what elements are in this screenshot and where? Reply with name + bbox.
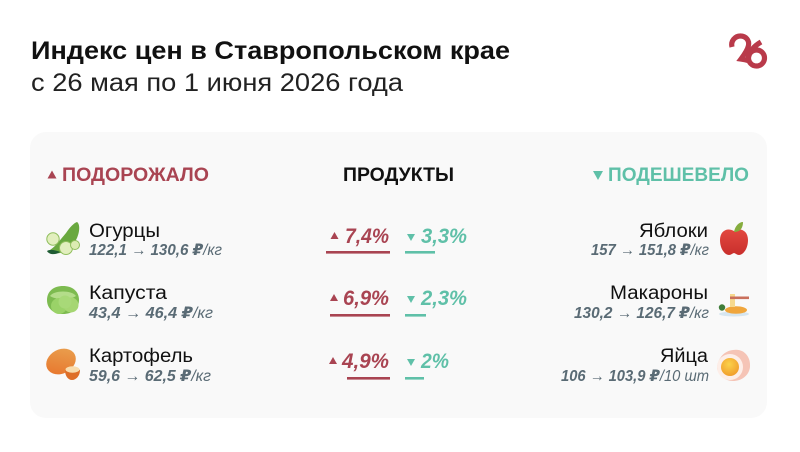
row: potato: Картофель (89, 346, 193, 367)
change row: cabbage and pasta (330, 287, 467, 317)
change row: potato and eggs: 4,9% (341, 350, 389, 373)
change row: cucumbers and apples: 7,4% (345, 225, 389, 248)
change row: cabbage and pasta: 6,9% (343, 287, 389, 310)
row: apples (591, 221, 709, 259)
title: Индекс цен в Ставропольском крае (31, 37, 510, 65)
title: с 26 мая по 1 июня 2026 года (31, 69, 403, 97)
row: cabbage (88, 283, 213, 322)
change row: cabbage and pasta: 2,3% (420, 287, 467, 310)
row: potato (89, 346, 211, 385)
heading: price rose: ПОДОРОЖАЛО (62, 165, 209, 186)
change row: cucumbers and apples (326, 225, 467, 254)
change row: potato and eggs: 2% (420, 350, 449, 373)
icon: logo 26 (732, 36, 764, 66)
row: cucumbers: Огурцы (89, 221, 160, 242)
icon: cabbage (47, 286, 79, 314)
row: cabbage: 43,4 → 46,4 ₽/кг (88, 305, 213, 322)
change row: cucumbers and apples: 3,3% (421, 225, 467, 248)
row: eggs: Яйца (660, 346, 708, 367)
heading: products: ПРОДУКТЫ (343, 165, 454, 186)
row: apples: 157 → 151,8 ₽/кг (591, 242, 709, 259)
change row: potato and eggs (329, 350, 449, 380)
title (31, 37, 510, 97)
row: eggs (561, 346, 709, 385)
icon: egg (717, 350, 750, 381)
row: potato: 59,6 → 62,5 ₽/кг (89, 368, 211, 385)
heading: price fell: ПОДЕШЕВЕЛО (608, 165, 749, 186)
panel: price table (30, 132, 767, 418)
icon: potato (42, 344, 80, 380)
icon: apple (720, 222, 748, 255)
icon: cucumber (47, 222, 80, 254)
row: pasta (574, 283, 709, 322)
row: pasta: 130,2 → 126,7 ₽/кг (574, 305, 709, 322)
row: cucumbers: 122,1 → 130,6 ₽/кг (89, 242, 222, 259)
row: apples: Яблоки (639, 221, 708, 242)
row: cabbage: Капуста (89, 283, 167, 304)
row: pasta: Макароны (610, 283, 708, 304)
row: eggs: 106 → 103,9 ₽/10 шт (561, 368, 709, 385)
icon: pasta (719, 294, 749, 316)
row: cucumbers (89, 221, 222, 259)
